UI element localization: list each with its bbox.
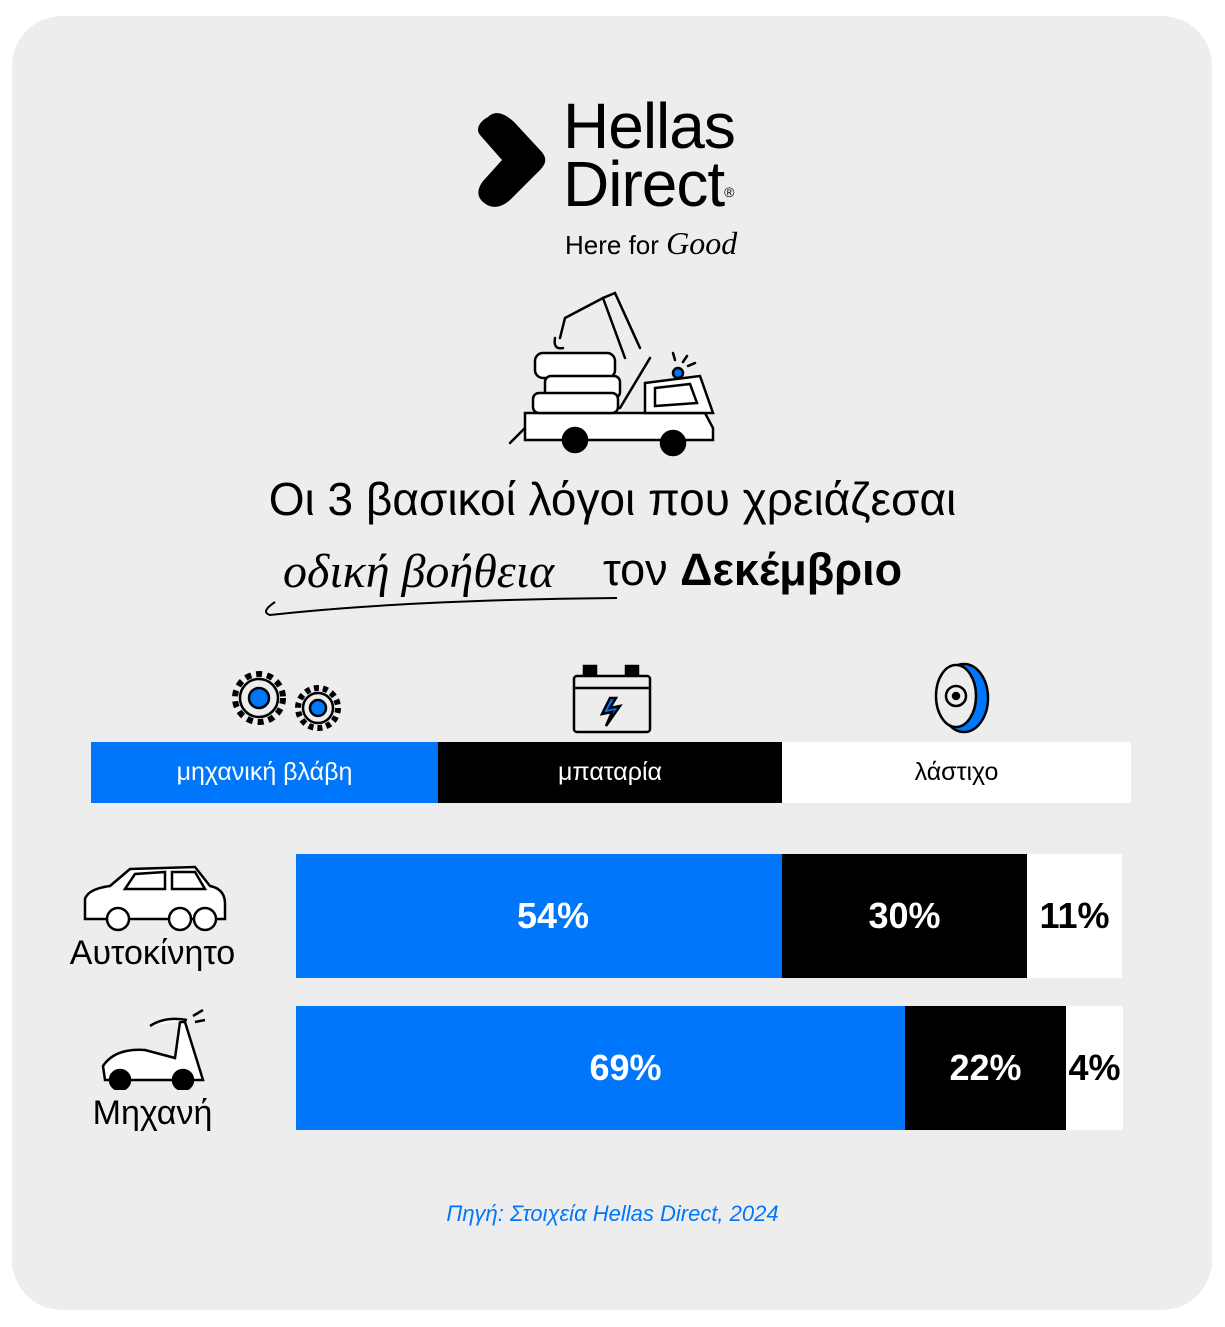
icon: gears (232, 671, 341, 731)
subtitle: οδική βοήθεια (283, 545, 554, 598)
legend: tyre: λάστιχο (915, 758, 998, 786)
stacked bar: 4% (1068, 1047, 1121, 1088)
legend: battery: μπαταρία (558, 758, 662, 786)
row: car (70, 854, 1122, 978)
icon: tow truck illustration (508, 291, 715, 456)
source note: Πηγή: Στοιχεία Hellas Direct, 2024 (446, 1201, 779, 1226)
legend (91, 742, 1131, 803)
icon: car (84, 866, 226, 932)
icon: battery (572, 664, 652, 734)
stacked bar: 69% (589, 1047, 662, 1088)
tagline: Here for Good (565, 225, 737, 261)
wordmark (563, 90, 735, 220)
row: moto (93, 1006, 1123, 1132)
icon: scooter (102, 1008, 206, 1090)
title: Οι 3 βασικοί λόγοι που χρειάζεσαι (269, 473, 956, 525)
stacked bar: 54% (517, 895, 589, 936)
subtitle (265, 544, 902, 616)
stacked bar (296, 1006, 1123, 1130)
stacked bar: 30% (868, 895, 941, 936)
legend: tyre (782, 742, 1131, 803)
logo (478, 90, 738, 261)
label: Αυτοκίνητο (70, 934, 235, 972)
legend: mechanical (91, 742, 438, 803)
stacked bar (296, 854, 1122, 978)
subtitle: τον Δεκέμβριο (603, 544, 902, 595)
legend: battery (438, 742, 782, 803)
stacked bar: 22% (949, 1047, 1022, 1088)
wordmark: Direct® (563, 148, 733, 220)
icon: chevron (478, 113, 546, 207)
wordmark: Hellas (563, 90, 735, 162)
stacked bar: 11% (1039, 895, 1110, 936)
icon: tyre (934, 662, 990, 734)
legend: mechanical: μηχανική βλάβη (177, 758, 352, 786)
label: Μηχανή (93, 1094, 212, 1132)
